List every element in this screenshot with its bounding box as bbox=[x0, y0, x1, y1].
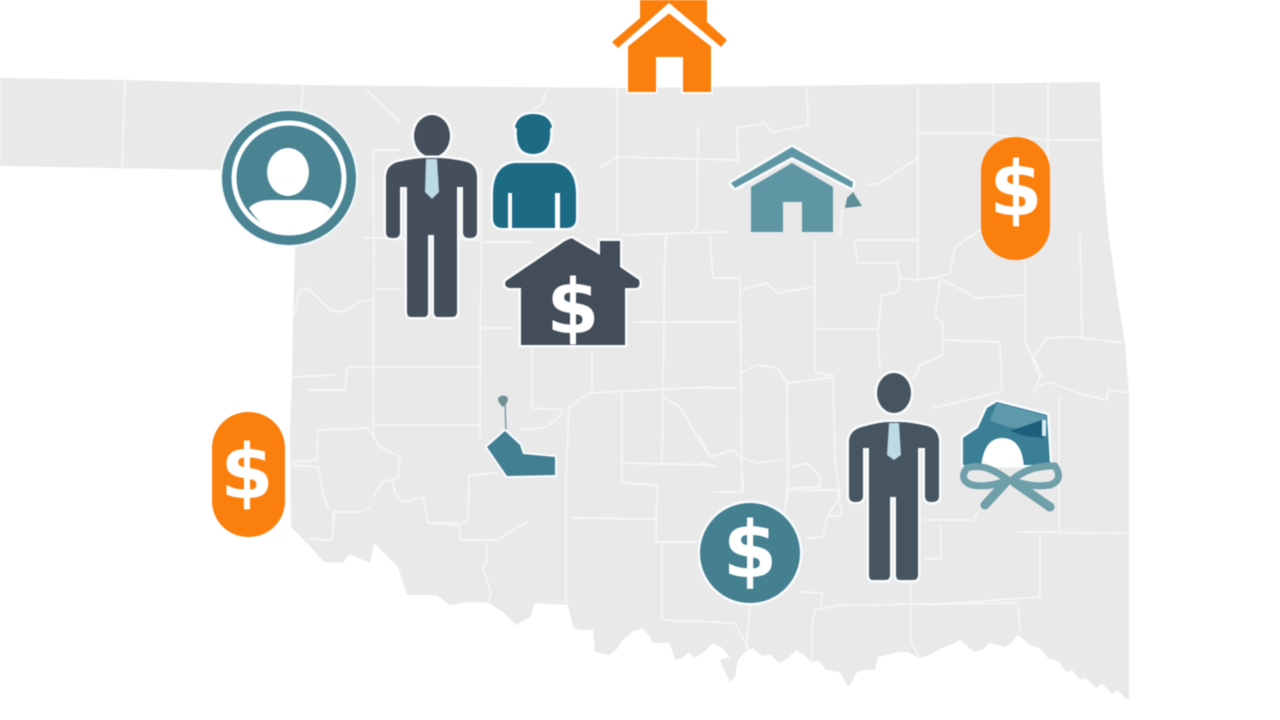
icon: boot with pin bbox=[487, 396, 555, 476]
icon: dollar coin bbox=[700, 503, 800, 603]
map: Oklahoma counties bbox=[0, 78, 1130, 700]
icon: teal house bbox=[731, 147, 862, 232]
icon: graduation cap with bow bbox=[963, 402, 1059, 507]
icon: orange house bbox=[612, 0, 727, 93]
icon: worker with hard hat bbox=[493, 114, 576, 229]
icon: dollar coin: $ bbox=[723, 506, 777, 596]
state outline bbox=[0, 78, 1129, 700]
icon: house with dollar: $ bbox=[547, 262, 599, 351]
icon: man in suit left bbox=[386, 115, 477, 317]
ribbon bow bbox=[963, 466, 1059, 507]
icon: orange dollar pill right bbox=[981, 137, 1050, 260]
icon: orange dollar pill right: $ bbox=[990, 144, 1042, 233]
icon: orange dollar pill left bbox=[212, 412, 285, 537]
icon: person in circle bbox=[221, 110, 357, 246]
icon: orange dollar pill left: $ bbox=[221, 427, 273, 516]
icon: house with dollar bbox=[505, 238, 640, 351]
icon: man in suit right bbox=[849, 373, 939, 580]
